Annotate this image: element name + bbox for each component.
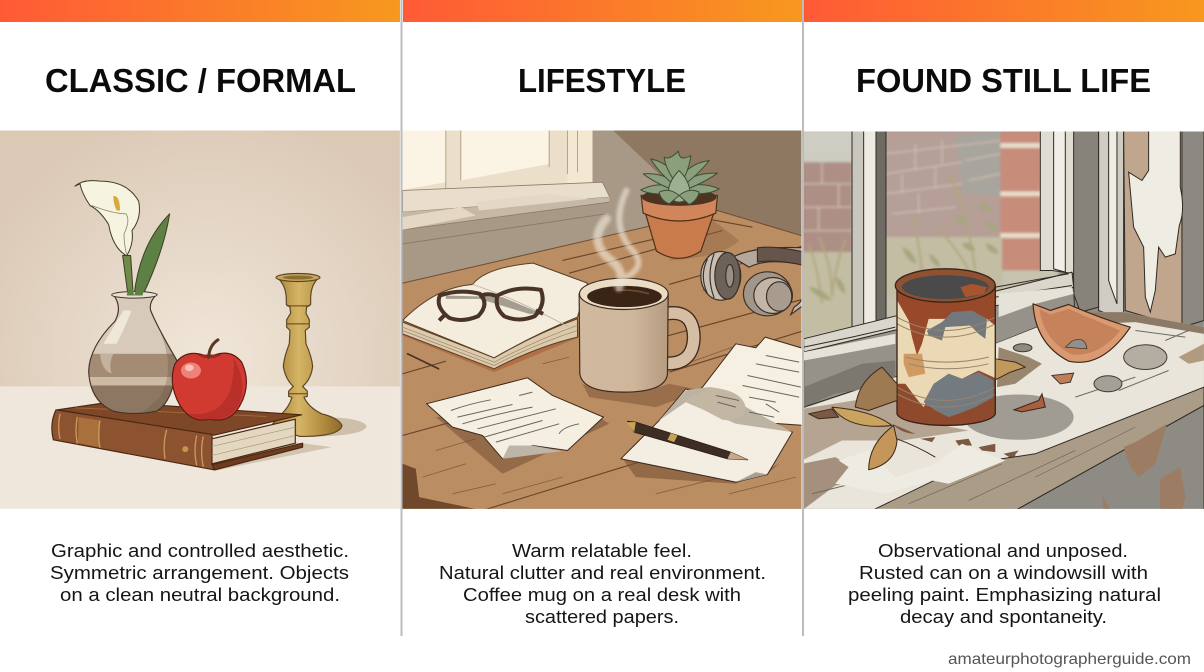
description: found: Observational and unposed. [878, 541, 1128, 561]
panel: classic formal [0, 0, 400, 605]
illustration: rusted can on windowsill [802, 130, 1204, 510]
description: lifestyle: Warm relatable feel. [512, 541, 692, 561]
small stones and fragments [1013, 344, 1167, 392]
window ledge [804, 272, 1075, 407]
dry leaves [809, 359, 1025, 470]
description: found: peeling paint. Emphasizing natural [848, 585, 1161, 605]
description: found [848, 541, 1161, 627]
description: found: Rusted can on a windowsill with [859, 563, 1148, 583]
letter paper [426, 378, 609, 474]
top accent bar: classic [0, 0, 400, 22]
open notebook and glasses [402, 263, 587, 372]
description: found: decay and spontaneity. [900, 607, 1107, 627]
pen [627, 421, 748, 460]
top accent bar: found [804, 0, 1204, 22]
sill surface [802, 312, 1204, 510]
description: lifestyle: scattered papers. [525, 607, 679, 627]
pencil [407, 354, 438, 369]
illustration: vase, apple, book and candlestick [0, 130, 400, 510]
front edge of sill [835, 387, 1204, 510]
flower and leaf [75, 181, 170, 295]
heading: found still life: FOUND STILL LIFE [856, 62, 1151, 99]
description: classic [50, 541, 349, 605]
description: classic: Symmetric arrangement. Objects [50, 563, 349, 583]
stacked papers and pen [621, 337, 804, 484]
description: classic: on a clean neutral background. [60, 585, 340, 605]
potted succulent [641, 151, 739, 260]
panel: lifestyle [402, 0, 804, 627]
eyeglasses [439, 289, 543, 320]
apple [172, 340, 246, 420]
footer: website credit: amateurphotographerguide.com [948, 651, 1191, 668]
window [402, 130, 610, 244]
book [52, 402, 303, 470]
description: classic: Graphic and controlled aesthetic. [51, 541, 349, 561]
description: lifestyle: Natural clutter and real environment. [439, 563, 766, 583]
coffee mug with steam [579, 190, 702, 407]
shadow under can [964, 394, 1074, 440]
panel: found still life [802, 0, 1204, 627]
heading: lifestyle: LIFESTYLE [518, 62, 686, 99]
window view with bricks and plants [802, 130, 1059, 344]
top accent bar: lifestyle [403, 0, 802, 22]
broken pottery shard [1033, 304, 1130, 362]
description: lifestyle [439, 541, 766, 627]
description: lifestyle: Coffee mug on a real desk with [463, 585, 741, 605]
headphones [701, 247, 804, 316]
weathered window frame [852, 130, 1204, 335]
wooden table [402, 210, 804, 510]
rusted can [895, 269, 997, 430]
candlestick [213, 273, 367, 471]
vase [88, 289, 178, 414]
illustration: desk with coffee mug [402, 130, 804, 510]
heading: classic formal: CLASSIC / FORMAL [45, 62, 356, 99]
